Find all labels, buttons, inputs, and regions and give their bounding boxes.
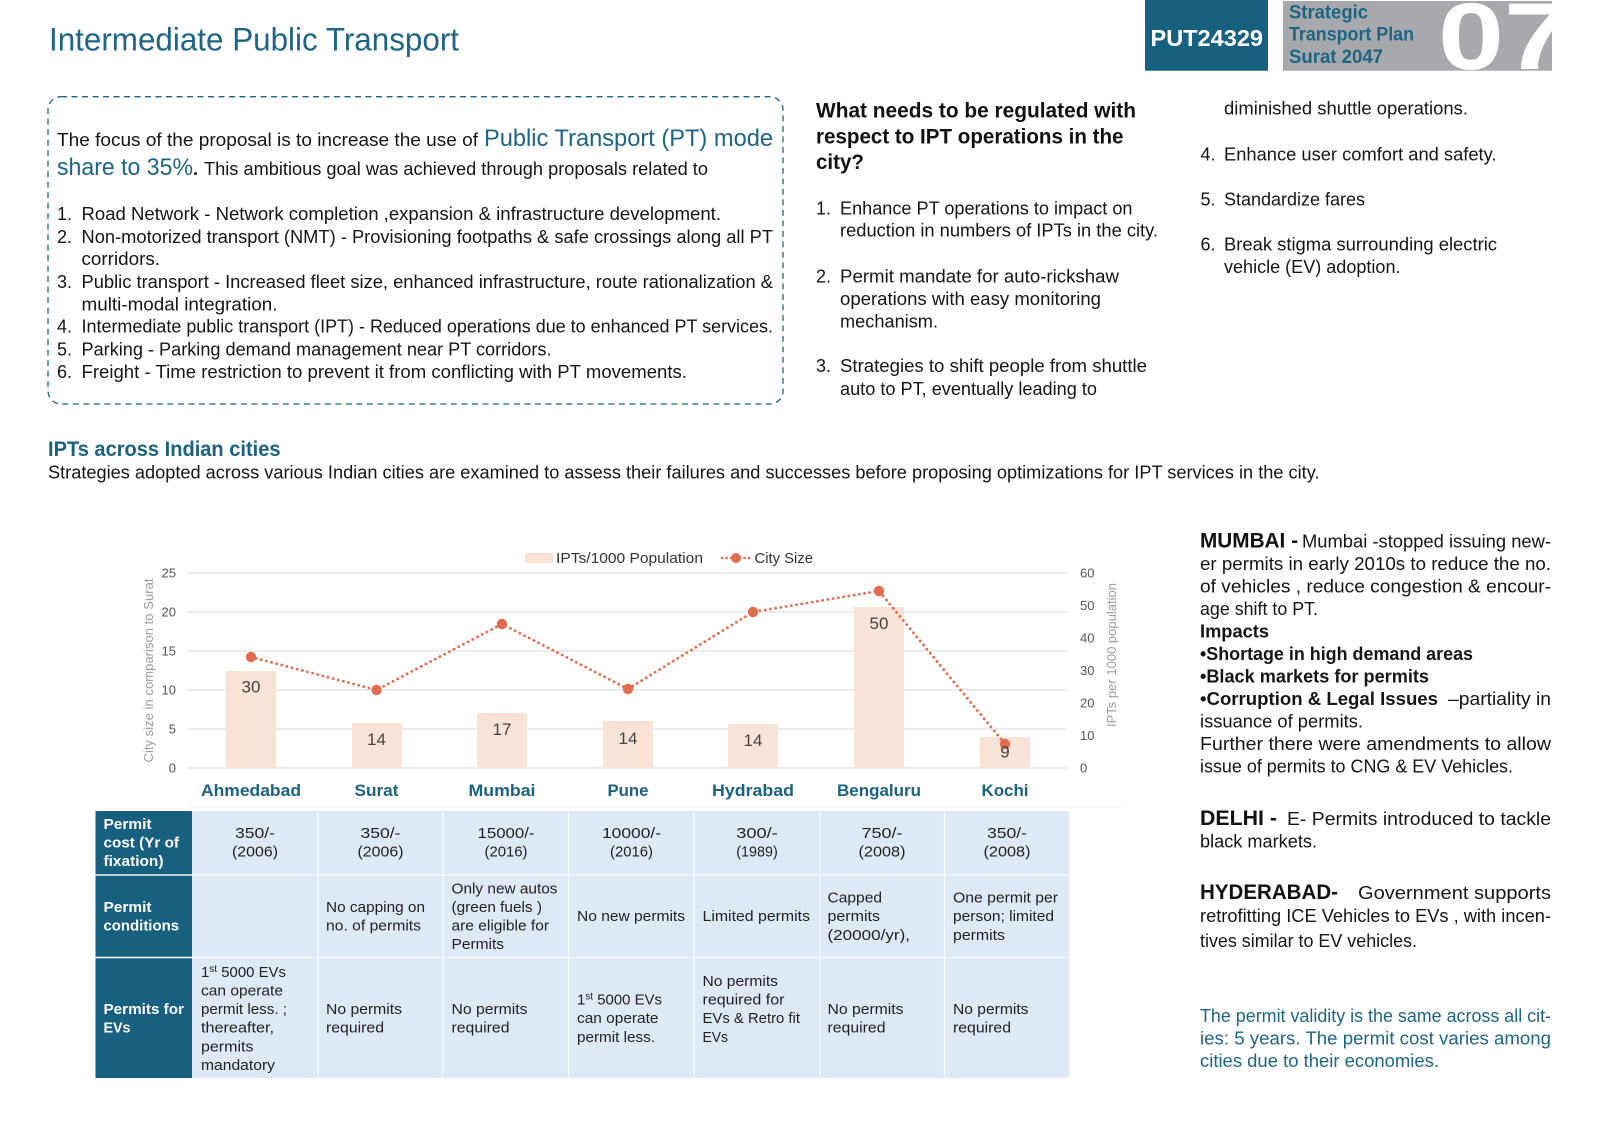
row: permit conditions: Capped bbox=[828, 890, 882, 906]
right axis labels: 20 bbox=[1080, 696, 1094, 710]
intro text: This ambitious goal was achieved through proposals related to bbox=[204, 159, 708, 179]
text: Mumbai strategy: •Black markets for permits bbox=[1200, 666, 1429, 686]
header badge: plan name and chapter number: Strategic bbox=[1289, 2, 1368, 24]
regulation list column 2: Enhance user comfort and safety. bbox=[1224, 144, 1496, 164]
text: Mumbai strategy: of vehicles , reduce congestion & encour- bbox=[1200, 576, 1551, 596]
bar value labels: 50 bbox=[870, 614, 888, 633]
proposal list: Freight - Time restriction to prevent it from conflicting with PT movements. bbox=[82, 362, 687, 382]
callout: permit validity note: ies: 5 years. The permit cost varies among bbox=[1200, 1028, 1551, 1048]
callout: permit validity note: cities due to their economies. bbox=[1200, 1051, 1439, 1071]
row: permits for EVs: thereafter, bbox=[201, 1020, 274, 1036]
proposal list: Road Network - Network completion ,expansion & infrastructure development. bbox=[82, 204, 721, 224]
row: permits for EVs: No permits bbox=[828, 1001, 904, 1018]
regulation list column 2: Standardize fares bbox=[1224, 189, 1365, 209]
proposal list: multi-modal integration. bbox=[82, 294, 278, 314]
right axis labels: 50 bbox=[1080, 598, 1094, 613]
text: Delhi strategy: DELHI - bbox=[1200, 807, 1277, 830]
right axis labels: IPTs per 1000 population bbox=[1105, 583, 1119, 727]
bar value labels: 30 bbox=[242, 678, 260, 696]
regulation list column 1: Strategies to shift people from shuttle bbox=[840, 356, 1147, 376]
regulation list column 2: 5. bbox=[1200, 189, 1216, 209]
row: permit cost: 10000/- bbox=[602, 825, 661, 842]
row: permits for EVs: required for bbox=[702, 992, 784, 1008]
row: permits for EVs: st bbox=[209, 964, 217, 975]
proposal list: corridors. bbox=[82, 249, 160, 269]
regulation list column 1: 2. bbox=[816, 266, 831, 286]
left axis labels: City size in comparison to Surat bbox=[142, 578, 156, 763]
chart: IPTs per 1000 population and city size bbox=[142, 550, 1122, 807]
row: permit conditions: (20000/yr), bbox=[828, 927, 910, 944]
row headers bbox=[104, 816, 184, 1036]
text: Mumbai strategy: Mumbai -stopped issuing new- bbox=[1302, 532, 1551, 552]
row: permit conditions: One permit per bbox=[953, 890, 1058, 906]
row: permit cost bbox=[232, 825, 1031, 860]
row headers: conditions bbox=[104, 918, 179, 934]
row: permits for EVs: can operate bbox=[201, 982, 283, 1000]
text: Mumbai strategy: –partiality in bbox=[1448, 689, 1551, 709]
regulation list column 2: 6. bbox=[1200, 234, 1216, 254]
row: permits for EVs: required bbox=[953, 1020, 1011, 1036]
regulation list column 1 bbox=[816, 198, 1158, 399]
text: Hyderabad strategy: tives similar to EV vehicles. bbox=[1200, 931, 1417, 951]
row: permits for EVs: mandatory bbox=[201, 1057, 276, 1074]
row headers: Permit bbox=[104, 899, 152, 916]
row: permit cost: 15000/- bbox=[478, 825, 535, 842]
section heading: IPTs across Indian cities: IPTs across Indian cities bbox=[48, 438, 280, 461]
row: permit cost: 300/- bbox=[736, 825, 778, 842]
text: Hyderabad strategy: HYDERABAD- bbox=[1200, 881, 1338, 904]
row: permit conditions: No new permits bbox=[577, 908, 685, 925]
proposal list: 3. bbox=[57, 272, 72, 292]
regulation list column 2: vehicle (EV) adoption. bbox=[1224, 257, 1400, 277]
proposal list: Public transport - Increased fleet size, enhanced infrastructure, route rationalization & bbox=[82, 272, 773, 292]
right axis labels: 40 bbox=[1080, 630, 1094, 646]
left axis labels: 15 bbox=[162, 644, 176, 658]
regulation heading bbox=[816, 98, 1136, 174]
regulation list column 1: 3. bbox=[816, 356, 831, 376]
row: permit conditions: person; limited bbox=[953, 908, 1054, 925]
row: permits for EVs: EVs & Retro fit bbox=[702, 1010, 801, 1027]
regulation heading: What needs to be regulated with bbox=[816, 98, 1136, 122]
regulation list column 1: 1. bbox=[816, 198, 831, 218]
intro text bbox=[57, 125, 773, 181]
intro text: The focus of the proposal is to increase the use of bbox=[57, 130, 479, 150]
row headers: Permit bbox=[104, 816, 152, 833]
header badge: project code bbox=[1145, 0, 1268, 71]
regulation list column 2: diminished shuttle operations. bbox=[1224, 99, 1468, 119]
bar value labels: 14 bbox=[367, 730, 386, 749]
proposal list: Non-motorized transport (NMT) - Provisioning footpaths & safe crossings along all PT bbox=[82, 227, 773, 247]
row: permits for EVs: required bbox=[452, 1020, 510, 1036]
text: Hyderabad strategy: Government supports bbox=[1358, 883, 1551, 903]
section heading: IPTs across Indian cities: Strategies adopted across various Indian cities are examined to assess their failures and successes before proposing optimizations for IPT services in the city. bbox=[48, 462, 1320, 482]
legend: City Size bbox=[754, 550, 813, 567]
header badge: plan name and chapter number: Surat 2047 bbox=[1289, 47, 1383, 68]
text: Hyderabad strategy bbox=[1200, 881, 1551, 951]
header badge: plan name and chapter number: Transport Plan bbox=[1289, 25, 1414, 46]
row: permits for EVs: permits bbox=[201, 1038, 254, 1056]
row: permits for EVs: permit less. ; bbox=[201, 1001, 287, 1018]
city labels: Ahmedabad bbox=[201, 781, 301, 800]
bar value labels: 9 bbox=[1000, 742, 1010, 762]
row: permit conditions: Limited permits bbox=[702, 908, 810, 925]
city labels: Hydrabad bbox=[712, 781, 794, 800]
title: Intermediate Public Transport bbox=[49, 22, 459, 58]
text: Delhi strategy: E- Permits introduced to tackle bbox=[1287, 809, 1551, 829]
text: Mumbai strategy: issue of permits to CNG & EV Vehicles. bbox=[1200, 756, 1513, 776]
section heading: IPTs across Indian cities bbox=[48, 438, 1320, 482]
regulation list column 1: mechanism. bbox=[840, 312, 938, 332]
text: Mumbai strategy: er permits in early 2010s to reduce the no. bbox=[1200, 554, 1551, 574]
row: permit conditions: are eligible for bbox=[452, 918, 549, 934]
row: permit cost: (2006) bbox=[358, 844, 404, 860]
regulation list column 2 bbox=[1200, 99, 1497, 277]
row: permits for EVs: required bbox=[326, 1020, 384, 1036]
left axis labels: 20 bbox=[162, 604, 176, 620]
table: permit comparison bbox=[96, 811, 1070, 1078]
right axis labels: 0 bbox=[1080, 760, 1087, 776]
row: permits for EVs: EVs bbox=[702, 1029, 728, 1046]
proposal list: 4. bbox=[57, 317, 72, 337]
panel: IPT regulation question bbox=[816, 98, 1497, 399]
bars bbox=[226, 607, 1030, 768]
text: Mumbai strategy: •Corruption & Legal Issues bbox=[1200, 689, 1438, 709]
text: Mumbai strategy: age shift to PT. bbox=[1200, 599, 1318, 619]
callout: permit validity note bbox=[1200, 1006, 1551, 1071]
right axis labels: 30 bbox=[1080, 663, 1094, 678]
text: Hyderabad strategy: retrofitting ICE Vehicles to EVs , with incen- bbox=[1200, 906, 1551, 926]
row: permit conditions: permits bbox=[953, 927, 1005, 944]
row: permits for EVs: 5000 EVs bbox=[217, 964, 286, 981]
row: permit cost: (2008) bbox=[984, 844, 1031, 860]
intro text: share to 35% bbox=[57, 154, 193, 181]
text: Mumbai strategy: Impacts bbox=[1200, 622, 1269, 642]
legend: IPTs/1000 Population bbox=[556, 550, 703, 567]
regulation heading: respect to IPT operations in the bbox=[816, 124, 1124, 148]
row: permits for EVs: No permits bbox=[702, 973, 778, 990]
proposal list bbox=[57, 204, 773, 382]
bar value labels: 14 bbox=[744, 731, 762, 750]
row: permit conditions: Only new autos bbox=[452, 880, 558, 898]
panel: proposal focus bbox=[48, 97, 783, 404]
proposal list: 1. bbox=[57, 204, 72, 224]
regulation list column 1: Permit mandate for auto-rickshaw bbox=[840, 266, 1120, 286]
row: permits for EVs: 1 bbox=[201, 964, 209, 981]
row: permit conditions: no. of permits bbox=[326, 918, 421, 934]
proposal list: 5. bbox=[57, 339, 72, 359]
row: permits for EVs: No permits bbox=[953, 1001, 1028, 1018]
left axis labels: 10 bbox=[162, 682, 176, 698]
city labels: Surat bbox=[354, 781, 399, 800]
intro text: . bbox=[193, 159, 198, 179]
row headers: EVs bbox=[104, 1020, 130, 1036]
proposal list: Parking - Parking demand management near PT corridors. bbox=[82, 339, 552, 359]
text: Mumbai strategy bbox=[1200, 530, 1552, 776]
left axis labels: 25 bbox=[162, 566, 176, 580]
bar value labels: 17 bbox=[493, 720, 511, 739]
city size line bbox=[246, 586, 1010, 749]
row: permits for EVs: 1 bbox=[577, 992, 585, 1008]
row: permit conditions: No capping on bbox=[326, 899, 425, 916]
row: permits for EVs bbox=[201, 964, 1028, 1074]
text: Delhi strategy: black markets. bbox=[1200, 832, 1317, 852]
regulation list column 1: auto to PT, eventually leading to bbox=[840, 379, 1097, 399]
city labels: Kochi bbox=[982, 781, 1028, 800]
left axis labels bbox=[142, 566, 176, 776]
proposal list: 6. bbox=[57, 362, 72, 382]
regulation list column 1: Enhance PT operations to impact on bbox=[840, 198, 1132, 218]
row: permit conditions: Permits bbox=[452, 936, 504, 953]
row: permit cost: (2008) bbox=[858, 844, 906, 860]
row: permit conditions: permits bbox=[828, 908, 880, 925]
bar value labels bbox=[242, 614, 1010, 762]
text: Delhi strategy bbox=[1200, 807, 1551, 852]
row: permits for EVs: required bbox=[828, 1020, 886, 1036]
left axis labels: 0 bbox=[169, 760, 176, 776]
dashed panel border bbox=[48, 97, 783, 404]
row: permit cost: 350/- bbox=[235, 825, 275, 842]
row: permits for EVs: permit less. bbox=[577, 1029, 655, 1046]
city labels: Mumbai bbox=[468, 781, 536, 800]
row: permit cost: (2006) bbox=[232, 844, 278, 860]
right axis labels: 10 bbox=[1080, 728, 1094, 743]
city labels bbox=[201, 781, 1028, 800]
text: Mumbai strategy: MUMBAI - bbox=[1200, 530, 1298, 552]
legend bbox=[525, 550, 813, 567]
row headers: cost (Yr of bbox=[104, 834, 180, 852]
proposal list: Intermediate public transport (IPT) - Reduced operations due to enhanced PT services. bbox=[82, 317, 773, 337]
row: permit cost: (2016) bbox=[610, 844, 653, 860]
regulation list column 2: 4. bbox=[1200, 144, 1216, 164]
header badge: project code: PUT24329 bbox=[1150, 25, 1263, 51]
row: permit cost: (1989) bbox=[736, 844, 778, 860]
bar value labels: 14 bbox=[619, 729, 637, 748]
intro text: Public Transport (PT) mode bbox=[484, 125, 773, 152]
regulation list column 1: operations with easy monitoring bbox=[840, 289, 1101, 309]
text: Mumbai strategy: Further there were amendments to allow bbox=[1200, 734, 1552, 754]
row: permit cost: 750/- bbox=[862, 825, 902, 842]
regulation heading: city? bbox=[816, 150, 864, 174]
proposal list: 2. bbox=[57, 227, 72, 247]
text: Mumbai strategy: issuance of permits. bbox=[1200, 712, 1363, 732]
row: permits for EVs: No permits bbox=[326, 1001, 402, 1018]
row: permit conditions: (green fuels ) bbox=[452, 899, 542, 916]
row: permits for EVs: 5000 EVs bbox=[593, 992, 662, 1008]
right axis labels bbox=[1080, 566, 1119, 776]
row: permits for EVs: st bbox=[585, 992, 593, 1002]
row: permit conditions bbox=[326, 880, 1058, 953]
row headers: Permits for bbox=[104, 1001, 184, 1018]
row: permits for EVs: can operate bbox=[577, 1010, 658, 1027]
row: permit cost: 350/- bbox=[360, 825, 400, 842]
header badge: plan name and chapter number bbox=[1283, 1, 1552, 71]
row: permit cost: (2016) bbox=[484, 844, 528, 860]
regulation list column 1: reduction in numbers of IPTs in the city. bbox=[840, 221, 1158, 241]
city labels: Pune bbox=[608, 781, 648, 800]
regulation list column 2: Break stigma surrounding electric bbox=[1224, 234, 1497, 254]
callout: permit validity note: The permit validity is the same across all cit- bbox=[1200, 1006, 1551, 1026]
row headers: fixation) bbox=[104, 853, 164, 870]
row: permit cost: 350/- bbox=[987, 825, 1027, 842]
text: Mumbai strategy: •Shortage in high demand areas bbox=[1200, 644, 1473, 664]
row: permits for EVs: No permits bbox=[452, 1001, 528, 1018]
right axis labels: 60 bbox=[1080, 566, 1094, 580]
left axis labels: 5 bbox=[169, 722, 176, 736]
city labels: Bengaluru bbox=[837, 781, 921, 800]
